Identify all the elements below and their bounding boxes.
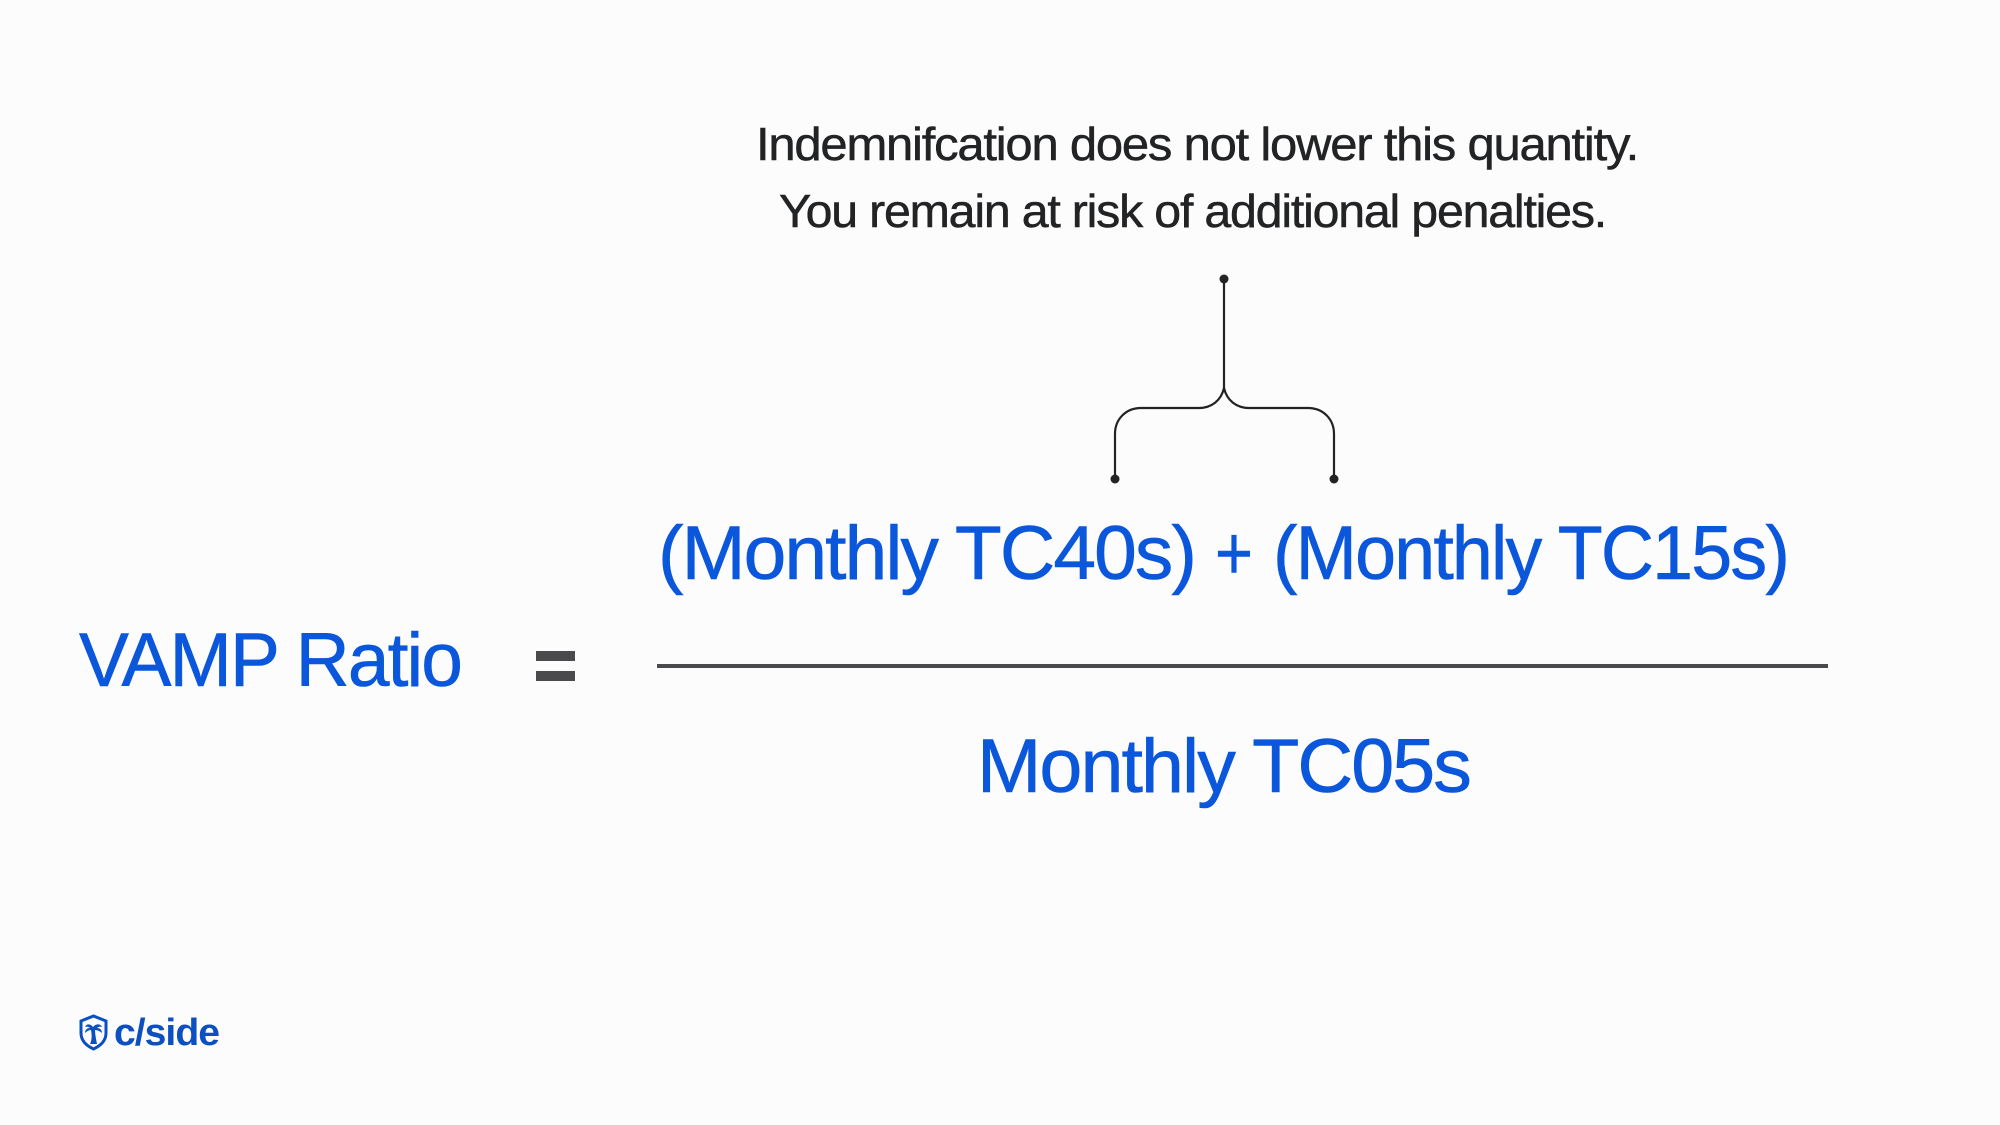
numerator — [658, 511, 1788, 596]
numerator: (Monthly TC15s) — [1273, 511, 1788, 596]
bracket connector — [1110, 274, 1338, 484]
numerator: + — [1215, 511, 1253, 596]
callout text: indemnification note: You remain at risk of additional penalties. — [779, 185, 1606, 237]
callout text: indemnification note: Indemnifcation does not lower this quantity. — [756, 118, 1638, 170]
VAMP Ratio label: VAMP Ratio — [79, 618, 461, 703]
icon: shield with palm tree — [81, 1016, 106, 1049]
callout text: indemnification note — [756, 118, 1638, 237]
logo: c/side — [81, 1012, 219, 1054]
fraction bar — [657, 664, 1828, 668]
denominator: Monthly TC05s — [977, 724, 1470, 809]
wordmark: c/side — [114, 1012, 219, 1054]
equals sign — [536, 651, 575, 681]
numerator: (Monthly TC40s) — [658, 511, 1195, 596]
